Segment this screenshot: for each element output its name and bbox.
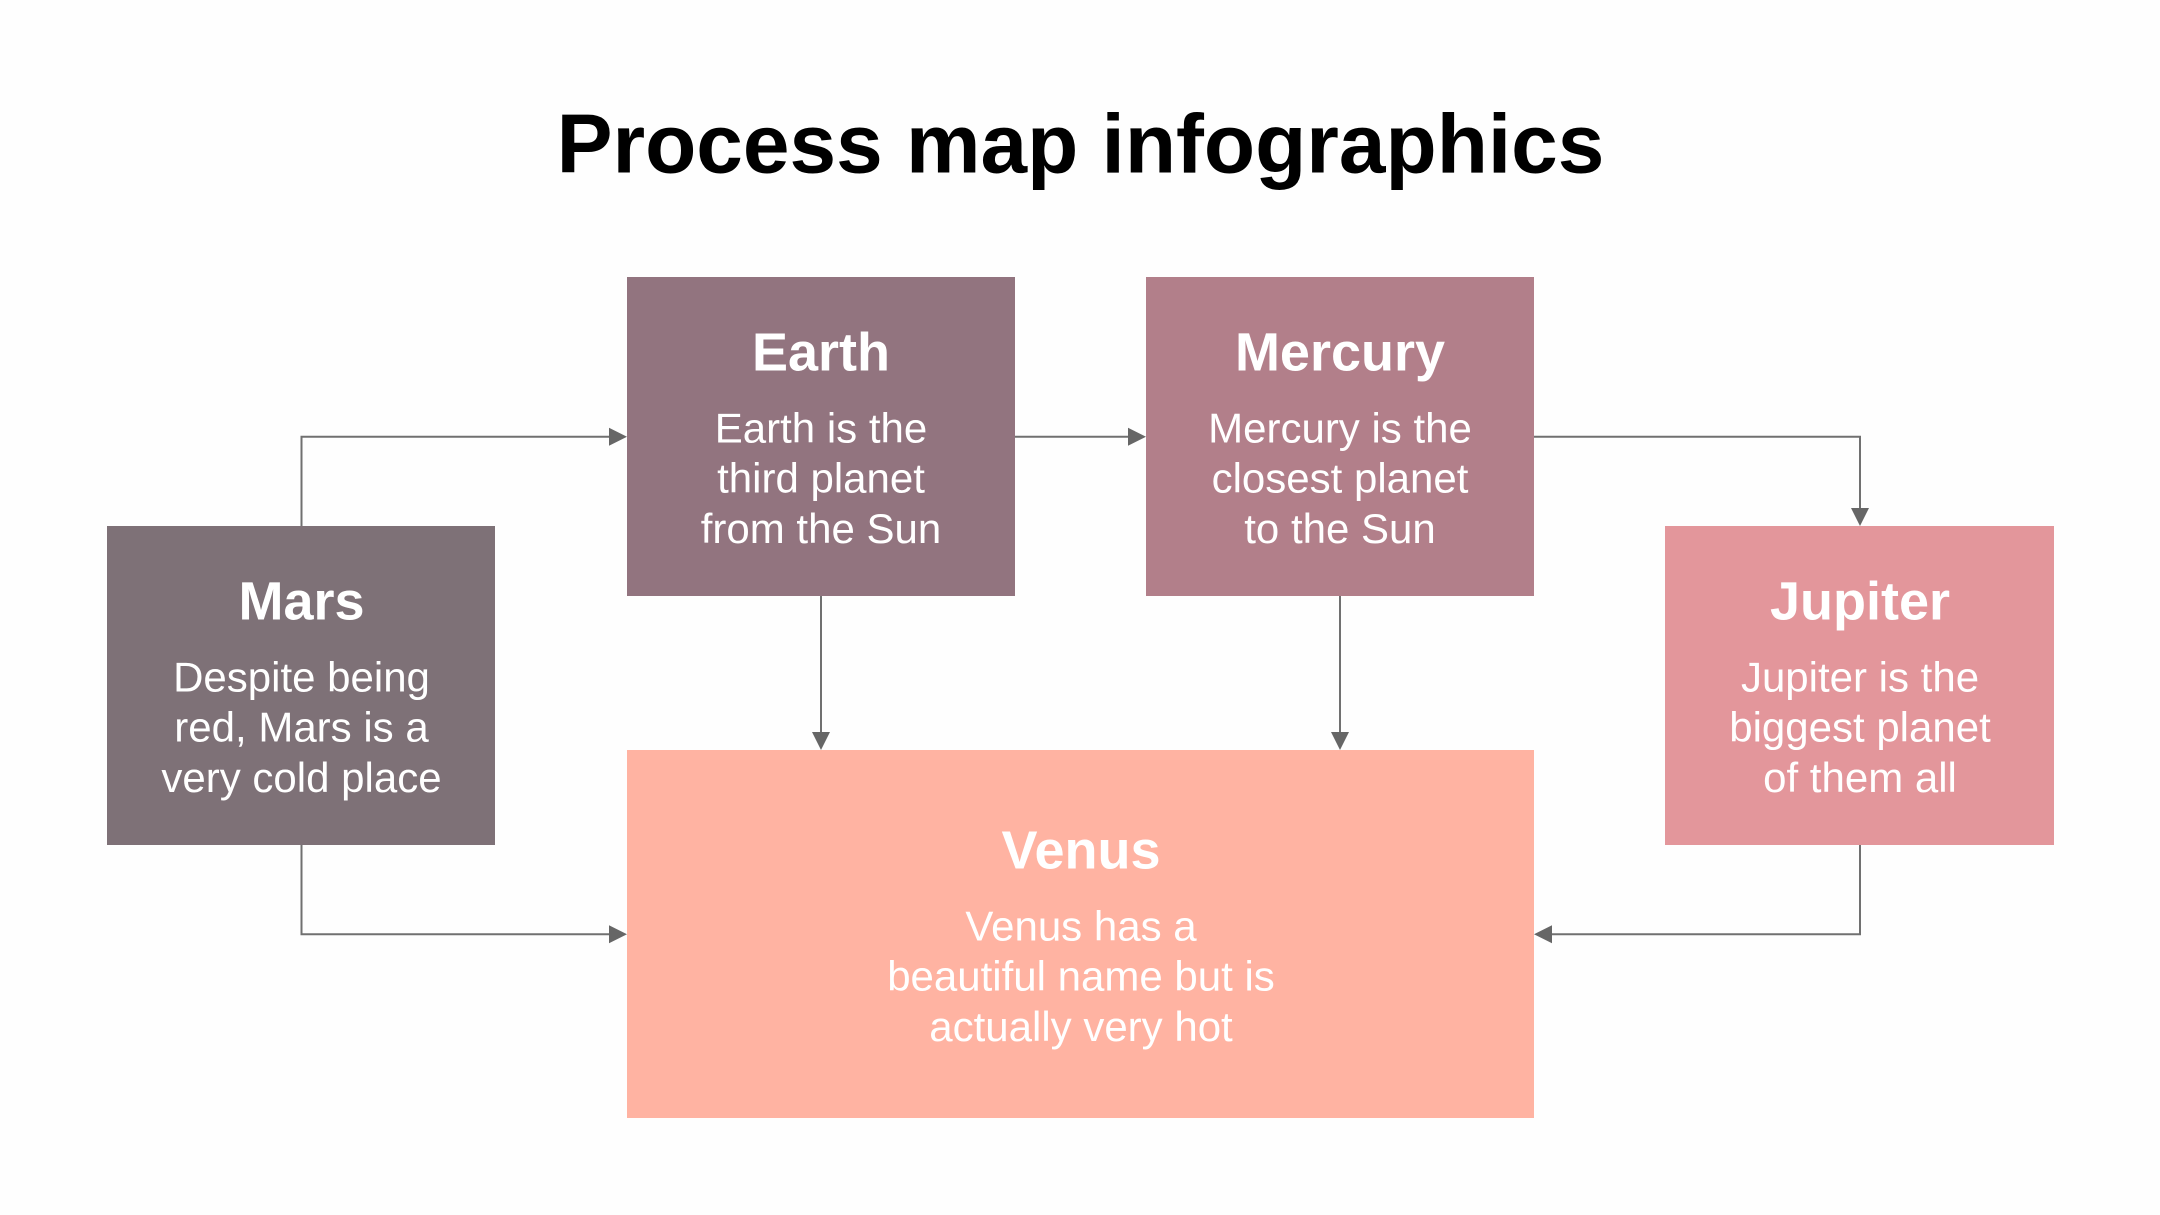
arrow: Earth to Venus: [812, 596, 830, 750]
panel: Earth: [627, 277, 1015, 596]
arrow: Earth to Mercury: [1015, 428, 1146, 446]
text: Jupiter description: [1729, 654, 1991, 801]
text: Venus description: [887, 902, 1275, 1050]
arrow: Mars to Earth: [302, 428, 627, 526]
text: Venus description: Venus has a: [965, 902, 1197, 950]
text: Mercury description: to the Sun: [1244, 505, 1436, 552]
text: Earth description: from the Sun: [701, 505, 941, 552]
panel: Mars: [107, 526, 495, 845]
text: Earth description: Earth is the: [715, 405, 927, 452]
title: Process map infographics: [557, 96, 1604, 190]
heading: Venus: Venus: [1001, 820, 1161, 880]
text: Mars description: [161, 654, 442, 801]
text: Earth description: [701, 405, 941, 552]
arrow: Jupiter to Venus: [1534, 844, 1860, 943]
text: Jupiter description: of them all: [1763, 754, 1957, 801]
heading: Earth: Earth: [752, 322, 890, 382]
text: Earth description: third planet: [717, 455, 925, 502]
text: Venus description: actually very hot: [929, 1003, 1233, 1050]
text: Jupiter description: Jupiter is the: [1741, 654, 1979, 701]
text: Venus description: beautiful name but is: [887, 952, 1275, 1000]
arrow: Mercury to Venus: [1331, 596, 1349, 750]
text: Mercury description: [1208, 405, 1472, 552]
text: Mars description: Despite being: [173, 654, 430, 701]
text: Mercury description: closest planet: [1212, 455, 1469, 502]
text: Jupiter description: biggest planet: [1729, 704, 1991, 751]
arrow: Mercury to Jupiter: [1534, 437, 1869, 526]
arrow: Mars to Venus: [302, 844, 627, 943]
panel: Mercury: [1146, 277, 1534, 596]
heading: Jupiter: Jupiter: [1770, 572, 1950, 632]
panel: Jupiter: [1665, 526, 2054, 845]
heading: Mercury: Mercury: [1235, 322, 1445, 382]
text: Mars description: red, Mars is a: [174, 704, 429, 751]
heading: Mars: Mars: [238, 572, 365, 632]
panel: Venus: [627, 750, 1534, 1118]
text: Mercury description: Mercury is the: [1208, 405, 1472, 452]
text: Mars description: very cold place: [161, 754, 442, 801]
